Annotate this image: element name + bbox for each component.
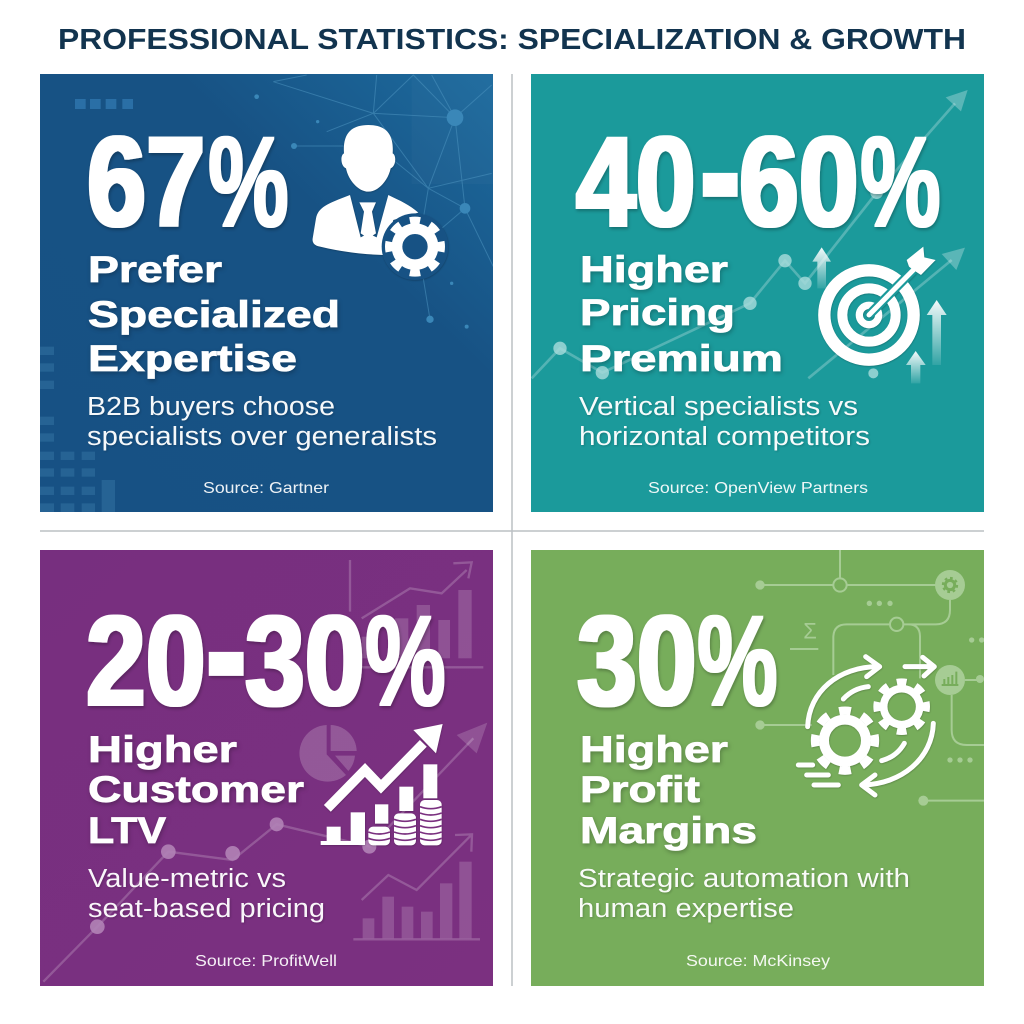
icon: rising arrow with bars and coins — [321, 724, 443, 845]
icon: businessperson with gear — [313, 125, 448, 280]
background growth lines — [532, 90, 968, 379]
panel: pricing premium — [531, 66, 984, 512]
heading: higher pricing premium: Premium — [580, 337, 783, 379]
stat: 67% — [87, 111, 289, 254]
stat: 67%: % — [208, 111, 289, 254]
heading: higher profit margins: Higher — [580, 728, 729, 770]
stat: 20-30%: 20 — [86, 590, 206, 733]
description: specialists over generalists — [87, 423, 437, 451]
stat: 30%: 30 — [577, 590, 697, 733]
heading: prefer specialized expertise: Specialized — [88, 293, 340, 335]
stat: 40-60%: - — [700, 66, 740, 273]
heading: higher pricing premium: Pricing — [580, 291, 735, 333]
heading: higher customer ltv: LTV — [88, 809, 166, 851]
background network pattern — [40, 74, 493, 512]
stat: 30%: % — [697, 590, 778, 733]
heading: higher profit margins: Profit — [580, 768, 701, 810]
stat: 40-60%: % — [860, 111, 941, 254]
title: PROFESSIONAL STATISTICS: SPECIALIZATION & GROWTH — [58, 24, 966, 56]
background circuit pattern: Σ — [803, 618, 817, 643]
panel: profit margins — [531, 550, 984, 986]
stat: 20-30%: % — [365, 590, 446, 733]
description — [578, 865, 910, 923]
stat: 40-60%: 40 — [576, 111, 696, 254]
stat: 20-30% — [86, 545, 446, 752]
heading: prefer specialized expertise — [88, 248, 340, 379]
icon: gears with cycle arrows — [798, 657, 934, 795]
source: Source: OpenView Partners — [648, 480, 868, 497]
source: Source: McKinsey — [686, 953, 830, 970]
heading: prefer specialized expertise: Prefer — [88, 248, 222, 290]
heading: higher customer ltv: Customer — [88, 768, 305, 810]
heading: higher profit margins: Margins — [580, 809, 757, 851]
description: Vertical specialists vs — [579, 393, 858, 421]
heading: higher customer ltv: Higher — [88, 728, 238, 770]
pie — [299, 725, 357, 782]
description: B2B buyers choose — [87, 393, 335, 421]
heading: higher profit margins — [580, 728, 757, 851]
stat: 67%: 67 — [87, 111, 205, 253]
panel: specialized expertise — [40, 74, 493, 512]
source: Source: ProfitWell — [195, 953, 337, 970]
heading: higher pricing premium: Higher — [580, 248, 729, 290]
description: Value-metric vs — [88, 865, 286, 893]
heading: prefer specialized expertise: Expertise — [88, 337, 297, 379]
stat: 30% — [577, 590, 778, 733]
heading: higher customer ltv — [88, 728, 305, 851]
stat: 20-30%: - — [206, 545, 246, 752]
source: Source: Gartner — [203, 480, 330, 497]
description: human expertise — [578, 895, 794, 923]
description — [87, 393, 437, 451]
stat: 40-60%: 60 — [739, 111, 859, 254]
description: horizontal competitors — [579, 423, 870, 451]
background circuit pattern — [755, 550, 984, 806]
heading: higher pricing premium — [580, 248, 783, 379]
panel: customer ltv — [40, 545, 493, 986]
background charts — [43, 560, 487, 982]
description — [88, 865, 325, 923]
icon: rising arrows — [812, 247, 947, 383]
stat: 20-30%: 30 — [245, 590, 365, 733]
description — [579, 393, 870, 451]
description: seat-based pricing — [88, 895, 325, 923]
description: Strategic automation with — [578, 865, 910, 893]
stat: 40-60% — [576, 66, 941, 273]
icon: target with arrow — [824, 247, 936, 360]
